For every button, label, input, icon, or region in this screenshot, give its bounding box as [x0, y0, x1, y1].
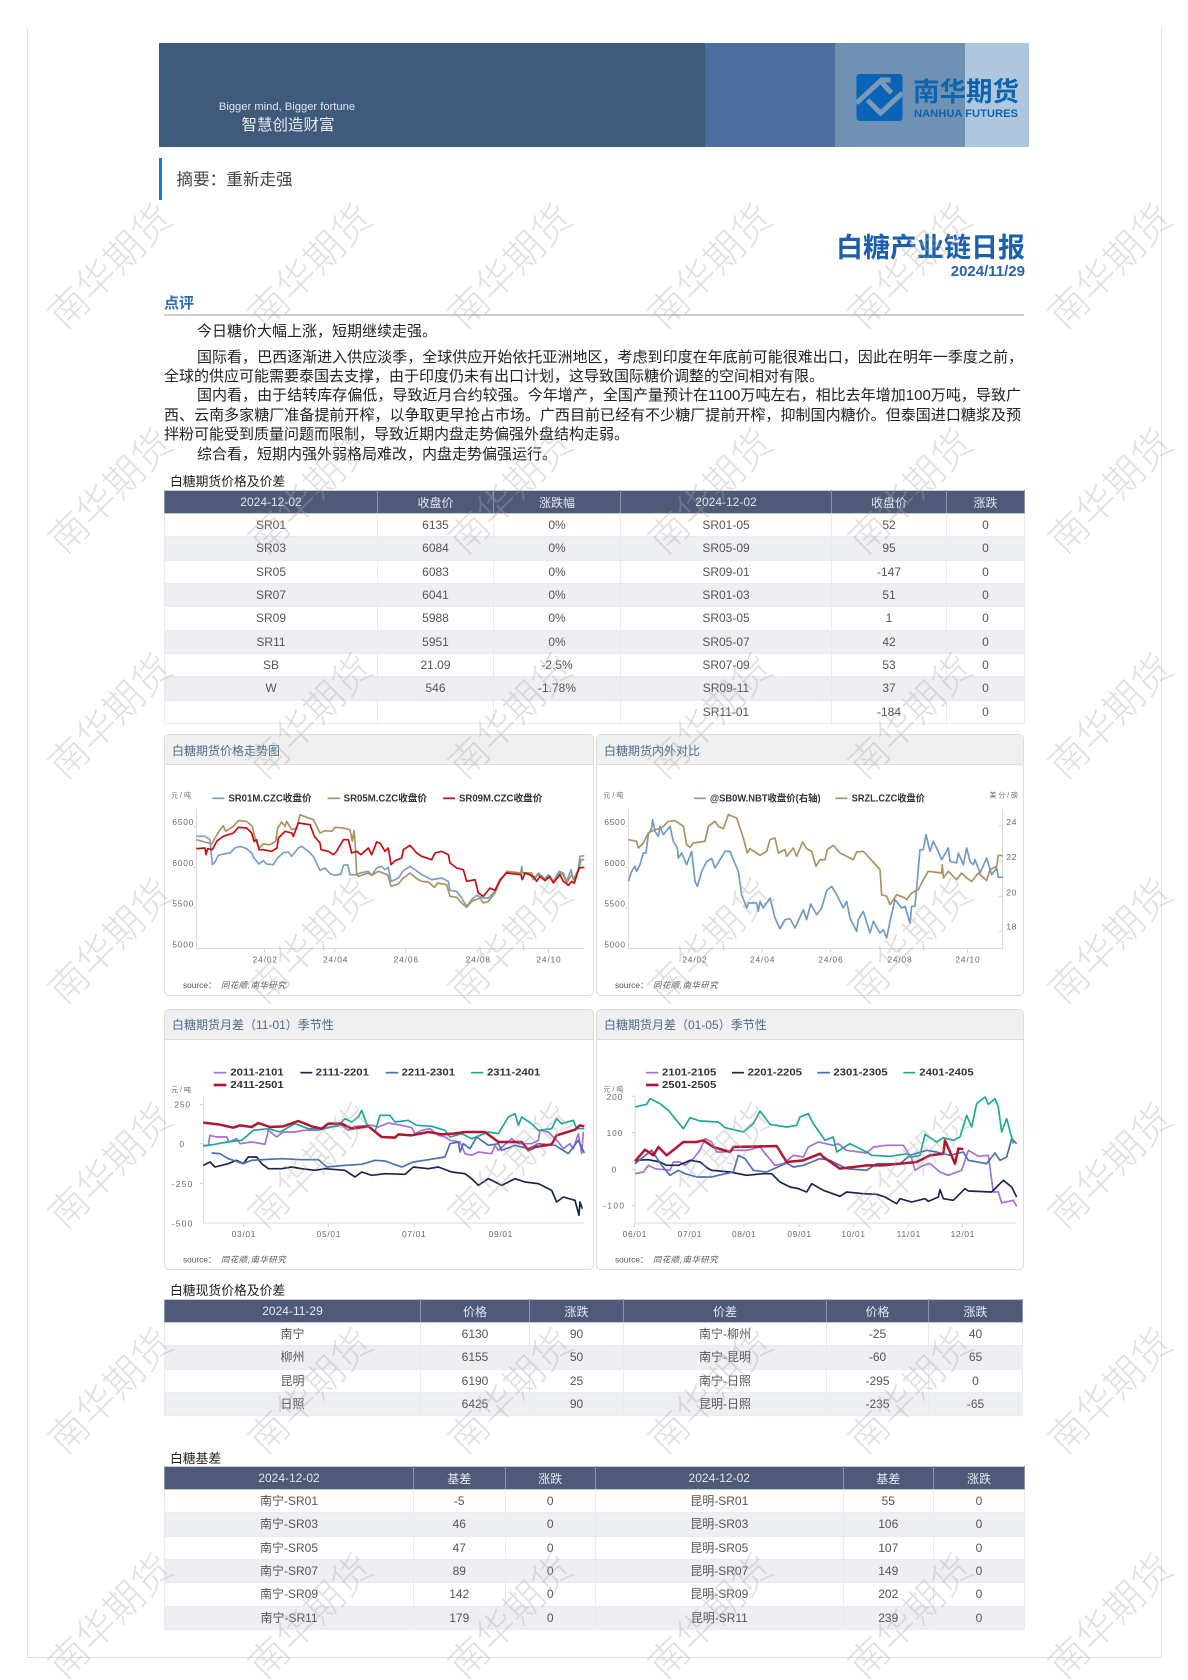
watermark grid: 南华期货 — [41, 1097, 182, 1238]
watermark grid: 南华期货 — [641, 197, 782, 338]
table: basis: 0 — [976, 1587, 982, 1601]
watermark grid: 南华期货 — [1041, 1322, 1182, 1463]
table: basis: 89 — [453, 1564, 466, 1578]
table: futures prices and spreads: 2024-12-02 — [240, 495, 302, 509]
table: futures prices and spreads: SR07-09 — [702, 658, 750, 672]
line chart: SR01 SR05 SR09: 24/08 — [466, 955, 490, 965]
line chart: SB0W vs SRZL dual axis: 6000 — [604, 858, 625, 868]
table: futures prices and spreads: SR03-05 — [702, 611, 750, 625]
watermark grid: 南华期货 — [841, 872, 982, 1013]
line chart: SB0W vs SRZL dual axis: SRZL.CZC收盘价 — [852, 793, 925, 805]
table: futures prices and spreads: SR11 — [256, 635, 286, 649]
table: futures prices and spreads: -147 — [877, 565, 901, 579]
line chart: 01-05 seasonal spreads: 08/01 — [732, 1229, 756, 1239]
table: futures prices and spreads: 6135 — [422, 518, 449, 532]
watermark grid: 南华期货 — [41, 647, 182, 788]
table: spot prices and spreads: 90 — [570, 1397, 583, 1411]
line chart: 01-05 seasonal spreads: 07/01 — [678, 1229, 702, 1239]
watermark grid: 南华期货 — [441, 1322, 582, 1463]
table: futures prices and spreads: 收盘价 — [871, 496, 907, 510]
watermark grid: 南华期货 — [841, 1322, 982, 1463]
table title: basis: 白糖基差 — [170, 1451, 221, 1466]
section heading: commentary — [164, 295, 1024, 316]
table: futures prices and spreads: 6083 — [422, 565, 449, 579]
table: spot prices and spreads: 6190 — [462, 1374, 488, 1388]
table: futures prices and spreads: 51 — [882, 588, 896, 602]
line chart: SB0W vs SRZL dual axis: 同花顺,南华研究 — [653, 980, 719, 990]
summary text: 摘要：重新走强 — [176, 170, 293, 189]
table: futures prices and spreads: 5951 — [422, 635, 449, 649]
watermark grid: 南华期货 — [41, 872, 182, 1013]
table: basis: 昆明-SR07 — [690, 1564, 748, 1578]
table: futures prices and spreads: SR07 — [256, 588, 286, 602]
table: futures prices and spreads: SB — [263, 658, 279, 672]
table: futures prices and spreads: SR09-11 — [703, 681, 749, 695]
line chart: SR01 SR05 SR09: 24/04 — [323, 955, 348, 965]
line chart: 11-01 seasonal spreads — [171, 1067, 585, 1264]
table title: spot prices: 白糖现货价格及价差 — [170, 1283, 285, 1298]
table: futures prices and spreads: 6041 — [422, 588, 449, 602]
watermark grid: 南华期货 — [241, 197, 382, 338]
table: spot prices and spreads: 南宁 — [280, 1327, 304, 1341]
line chart: SB0W vs SRZL dual axis: 24/04 — [750, 955, 775, 965]
table: spot prices and spreads: 价差 — [713, 1304, 737, 1318]
line chart: SR01 SR05 SR09: 5000 — [172, 940, 194, 950]
commentary text block: 西、云南多家糖厂准备提前开榨，以争取更早抢占市场。广西目前已经有不少糖厂提前开榨，抑制国内糖价。但泰国进口糖浆及预 — [164, 406, 1021, 424]
table: spot prices and spreads: -295 — [865, 1374, 890, 1388]
table: futures prices and spreads: 37 — [882, 681, 896, 695]
watermark grid: 南华期货 — [41, 1322, 182, 1463]
table: futures prices and spreads: 0 — [982, 565, 989, 579]
table: futures prices and spreads: 52 — [882, 518, 896, 532]
line chart: SB0W vs SRZL dual axis: 24 — [1006, 817, 1017, 827]
table: spot prices and spreads: 日照 — [280, 1397, 304, 1411]
table: basis: 0 — [547, 1541, 554, 1555]
table: basis: 179 — [449, 1611, 469, 1625]
table: futures prices and spreads: -2.5% — [541, 658, 573, 672]
commentary text block: 今日糖价大幅上涨，短期继续走强。 — [197, 322, 437, 340]
watermark grid: 南华期货 — [1041, 872, 1182, 1013]
table: spot prices and spreads: 南宁-昆明 — [699, 1350, 751, 1364]
watermark grid: 南华期货 — [441, 872, 582, 1013]
watermark grid: 南华期货 — [441, 422, 582, 563]
table: basis: 0 — [976, 1564, 982, 1578]
table: futures prices and spreads: 0% — [548, 635, 566, 649]
watermark grid: 南华期货 — [1041, 1097, 1182, 1238]
table: spot prices and spreads: -25 — [869, 1327, 886, 1341]
line chart: SR01 SR05 SR09 — [171, 791, 584, 990]
table: futures prices and spreads: 0 — [982, 705, 989, 719]
table: basis: 南宁-SR05 — [260, 1541, 318, 1555]
line chart: 11-01 seasonal spreads: -250 — [172, 1179, 193, 1189]
panel title — [597, 1010, 1023, 1040]
line chart: 11-01 seasonal spreads: 07/01 — [402, 1229, 426, 1239]
table: basis: 0 — [976, 1611, 982, 1625]
table: basis: 涨跌 — [967, 1472, 991, 1486]
watermark grid: 南华期货 — [841, 647, 982, 788]
watermark grid: 南华期货 — [241, 647, 382, 788]
table: futures prices and spreads: 0% — [548, 518, 566, 532]
line chart: 01-05 seasonal spreads: 09/01 — [787, 1229, 811, 1239]
table: basis: 0 — [547, 1494, 554, 1508]
table: basis: 0 — [976, 1517, 982, 1531]
line chart: 11-01 seasonal spreads: 2111-2201 — [316, 1067, 370, 1078]
line chart: 01-05 seasonal spreads: 0 — [612, 1164, 617, 1174]
table: basis: 0 — [976, 1494, 982, 1508]
line chart: 11-01 seasonal spreads: source： — [183, 1254, 216, 1264]
line chart: 11-01 seasonal spreads: 03/01 — [232, 1229, 256, 1239]
line chart: 11-01 seasonal spreads: 2311-2401 — [487, 1067, 541, 1078]
table: futures prices and spreads: 0 — [982, 681, 989, 695]
table: spot prices and spreads: 涨跌 — [963, 1304, 988, 1318]
line chart: 01-05 seasonal spreads: 06/01 — [623, 1229, 647, 1239]
line chart: SR01 SR05 SR09: SR05M.CZC收盘价 — [344, 793, 427, 805]
line chart: 01-05 seasonal spreads: 200 — [607, 1092, 623, 1102]
banner slogan chinese: 智慧创造财富 — [241, 117, 334, 134]
table: spot prices and spreads: 25 — [570, 1374, 583, 1388]
panel title — [165, 735, 592, 765]
watermark grid: 南华期货 — [841, 1097, 982, 1238]
line chart: SR01 SR05 SR09: 6000 — [172, 858, 194, 868]
table: futures prices and spreads: 0 — [982, 518, 989, 532]
table: basis: 0 — [976, 1541, 982, 1555]
table: basis: 昆明-SR01 — [690, 1494, 748, 1508]
line chart: SB0W vs SRZL dual axis: 24/08 — [887, 955, 912, 965]
line chart: 11-01 seasonal spreads: 0 — [179, 1139, 184, 1149]
watermark grid: 南华期货 — [241, 1097, 382, 1238]
table: futures prices and spreads: 42 — [882, 635, 896, 649]
line chart: SR01 SR05 SR09: 6500 — [172, 817, 194, 827]
panel title: 白糖期货内外对比 — [604, 744, 700, 758]
table: futures prices and spreads: 2024-12-02 — [695, 495, 757, 509]
table: spot prices and spreads: 昆明-日照 — [699, 1397, 751, 1411]
line chart: 11-01 seasonal spreads: 05/01 — [317, 1229, 341, 1239]
table: futures prices and spreads: 546 — [425, 681, 446, 695]
watermark grid: 南华期货 — [1041, 422, 1182, 563]
banner band: mid blue — [705, 43, 835, 147]
line chart: SB0W vs SRZL dual axis: 5500 — [604, 899, 625, 909]
table: futures prices and spreads: 0 — [982, 588, 989, 602]
line chart: 01-05 seasonal spreads: 2201-2205 — [748, 1067, 803, 1078]
commentary text block: 综合看，短期内强外弱格局难改，内盘走势偏强运行。 — [197, 446, 557, 462]
line chart: SB0W vs SRZL dual axis: 20 — [1006, 888, 1017, 898]
table: futures prices and spreads: 6084 — [422, 541, 449, 555]
table: basis: 昆明-SR09 — [690, 1587, 748, 1601]
table: spot prices and spreads: 40 — [969, 1327, 982, 1341]
table: futures prices and spreads: SR01-03 — [702, 588, 750, 602]
panel: domestic vs overseas chart — [596, 734, 1024, 996]
table: spot prices and spreads: 昆明 — [280, 1374, 304, 1388]
line chart: 01-05 seasonal spreads: 2301-2305 — [833, 1067, 888, 1078]
watermark grid: 南华期货 — [441, 1097, 582, 1238]
line chart: 11-01 seasonal spreads: 同花顺,南华研究 — [221, 1254, 287, 1264]
table: futures prices and spreads: SR03 — [256, 541, 286, 555]
table: spot prices and spreads: 6425 — [462, 1397, 488, 1411]
table: basis: 南宁-SR11 — [260, 1611, 318, 1625]
table: basis: 106 — [878, 1517, 898, 1531]
line chart: SB0W vs SRZL dual axis: @SB0W.NBT收盘价(右轴) — [710, 793, 821, 805]
table: futures prices and spreads: SR05-07 — [702, 635, 750, 649]
table: futures prices and spreads: 0% — [548, 588, 566, 602]
table: futures prices and spreads: SR05-09 — [702, 541, 750, 555]
table: basis: 南宁-SR09 — [260, 1587, 318, 1601]
table: futures prices and spreads: SR09 — [256, 611, 286, 625]
line chart: SR01 SR05 SR09: 同花顺,南华研究 — [221, 980, 287, 990]
watermark grid: 南华期货 — [441, 647, 582, 788]
table: spot prices and spreads — [164, 1299, 1023, 1416]
table: basis: 47 — [453, 1541, 466, 1555]
commentary text block: 拌粉可能受到质量问题而限制，导致近期内盘走势偏强外盘结构走弱。 — [164, 426, 629, 443]
table: basis: 昆明-SR03 — [690, 1517, 748, 1531]
banner slogan english: Bigger mind, Bigger fortune — [219, 101, 355, 113]
table: basis: 46 — [453, 1517, 466, 1531]
section heading: commentary: 点评 — [164, 295, 194, 312]
table title: futures prices: 白糖期货价格及价差 — [170, 474, 285, 489]
line chart: 11-01 seasonal spreads: 元/吨 — [171, 1085, 191, 1094]
commentary text block: 国内看，由于结转库存偏低，导致近月合约较强。今年增产，全国产量预计在1100万吨左右，相比去年增加100万吨，导致广 — [197, 387, 1021, 404]
table: futures prices and spreads: 0% — [548, 541, 566, 555]
table: futures prices and spreads — [164, 490, 1025, 724]
line chart: SB0W vs SRZL dual axis: 6500 — [604, 817, 625, 827]
watermark grid: 南华期货 — [41, 197, 182, 338]
table: basis: 基差 — [447, 1472, 471, 1486]
panel title — [597, 735, 1023, 765]
report title: 白糖产业链日报 — [836, 233, 1025, 263]
table: spot prices and spreads: -60 — [869, 1350, 886, 1364]
table: basis: 2024-12-02 — [689, 1471, 750, 1485]
line chart: SR01 SR05 SR09: source： — [183, 980, 216, 990]
watermark grid: 南华期货 — [241, 422, 382, 563]
watermark grid: 南华期货 — [641, 872, 782, 1013]
line chart: SB0W vs SRZL dual axis: source： — [615, 980, 648, 990]
line chart: 11-01 seasonal spreads: 2411-2501 — [230, 1080, 284, 1091]
report date: 2024/11/29 — [951, 262, 1025, 280]
line chart: SB0W vs SRZL dual axis: 24/02 — [682, 955, 707, 965]
table: basis: 2024-12-02 — [258, 1471, 320, 1485]
banner band: pale blue — [965, 43, 1029, 147]
line chart: 01-05 seasonal spreads: 2101-2105 — [662, 1067, 717, 1078]
line chart: SR01 SR05 SR09: 5500 — [172, 899, 194, 909]
line chart: SB0W vs SRZL dual axis: 元/吨 — [603, 791, 623, 800]
watermark grid: 南华期货 — [41, 422, 182, 563]
header banner — [159, 43, 1029, 147]
table: spot prices and spreads: 90 — [570, 1327, 583, 1341]
line chart: 01-05 seasonal spreads: -100 — [603, 1200, 624, 1210]
table: basis: 南宁-SR07 — [260, 1564, 318, 1578]
table: futures prices and spreads: -184 — [877, 705, 901, 719]
table: futures prices and spreads: 1 — [886, 611, 892, 625]
table: basis: 南宁-SR01 — [260, 1494, 318, 1508]
watermark grid: 南华期货 — [841, 422, 982, 563]
table: spot prices and spreads: 价格 — [865, 1304, 890, 1318]
table: basis: 南宁-SR03 — [260, 1517, 318, 1531]
table: spot prices and spreads: -65 — [967, 1397, 984, 1411]
watermark grid: 南华期货 — [1041, 647, 1182, 788]
table: spot prices and spreads: 65 — [969, 1350, 982, 1364]
watermark grid: 南华期货 — [641, 1322, 782, 1463]
icon: nanhua logo mark — [856, 74, 903, 121]
table: futures prices and spreads: 0% — [548, 611, 566, 625]
table: futures prices and spreads: 收盘价 — [417, 496, 454, 510]
line chart: SB0W vs SRZL dual axis: 24/06 — [818, 955, 843, 965]
table: spot prices and spreads: 0 — [972, 1374, 979, 1388]
watermark grid: 南华期货 — [241, 1322, 382, 1463]
watermark grid: 南华期货 — [241, 872, 382, 1013]
table: futures prices and spreads: 5988 — [422, 611, 449, 625]
line chart: 01-05 seasonal spreads: 同花顺,南华研究 — [653, 1254, 719, 1264]
table: spot prices and spreads: 6155 — [462, 1350, 488, 1364]
line chart: 11-01 seasonal spreads: -500 — [172, 1218, 193, 1228]
table: futures prices and spreads: 21.09 — [420, 658, 451, 672]
line chart: 01-05 seasonal spreads: source： — [615, 1254, 648, 1264]
line chart: SB0W vs SRZL dual axis — [603, 791, 1018, 990]
table: spot prices and spreads: 南宁-日照 — [699, 1374, 751, 1388]
line chart: 01-05 seasonal spreads: 100 — [607, 1128, 623, 1138]
table: basis: 107 — [878, 1541, 898, 1555]
line chart: 01-05 seasonal spreads: 11/01 — [897, 1229, 921, 1239]
table: futures prices and spreads: SR09-01 — [702, 565, 750, 579]
commentary text block: 国际看，巴西逐渐进入供应淡季，全球供应开始依托亚洲地区，考虑到印度在年底前可能很难出口，因此在明年一季度之前， — [197, 348, 1023, 366]
table: spot prices and spreads: -235 — [865, 1397, 890, 1411]
commentary text block: 全球的供应可能需要泰国去支撑，由于印度仍未有出口计划，这导致国际糖价调整的空间相对有限。 — [164, 368, 824, 385]
panel title: 白糖期货月差（01-05）季节性 — [604, 1018, 767, 1032]
panel title: 白糖期货价格走势图 — [172, 744, 280, 758]
table: basis: 142 — [449, 1587, 469, 1601]
table: spot prices and spreads: 50 — [570, 1350, 583, 1364]
line chart: SR01 SR05 SR09: SR09M.CZC收盘价 — [459, 793, 543, 805]
watermark grid: 南华期货 — [441, 197, 582, 338]
watermark grid: 南华期货 — [841, 197, 982, 338]
summary accent bar — [159, 158, 162, 200]
line chart: 01-05 seasonal spreads: 10/01 — [841, 1229, 865, 1239]
line chart: 11-01 seasonal spreads: 250 — [174, 1099, 190, 1109]
watermark grid: 南华期货 — [641, 1097, 782, 1238]
table: futures prices and spreads: SR01-05 — [702, 518, 750, 532]
line chart: SR01 SR05 SR09: SR01M.CZC收盘价 — [228, 793, 312, 805]
table: basis: 202 — [878, 1587, 898, 1601]
logo wordmark chinese: 南华期货 — [913, 77, 1019, 107]
table: futures prices and spreads: SR11-01 — [703, 705, 749, 719]
table: basis: -5 — [454, 1494, 465, 1508]
line chart: SB0W vs SRZL dual axis: 22 — [1006, 852, 1017, 862]
line chart: SB0W vs SRZL dual axis: 24/10 — [955, 955, 980, 965]
line chart: 01-05 seasonal spreads: 元/吨 — [603, 1084, 623, 1093]
line chart: SR01 SR05 SR09: 24/06 — [394, 955, 418, 965]
panel title — [165, 1010, 592, 1040]
table: futures prices and spreads: 95 — [882, 541, 896, 555]
panel title: 白糖期货月差（11-01）季节性 — [172, 1018, 334, 1032]
table: spot prices and spreads: 南宁-柳州 — [699, 1327, 751, 1341]
table: futures prices and spreads: -1.78% — [538, 681, 576, 695]
line chart: 11-01 seasonal spreads: 2011-2101 — [230, 1067, 284, 1078]
line chart: 01-05 seasonal spreads — [603, 1067, 1018, 1264]
panel: futures price trend chart — [164, 734, 594, 996]
table: futures prices and spreads: 53 — [882, 658, 896, 672]
table: spot prices and spreads: 2024-11-29 — [262, 1304, 323, 1318]
table: basis: 55 — [882, 1494, 895, 1508]
table: futures prices and spreads: W — [265, 681, 277, 695]
line chart: SR01 SR05 SR09: 24/10 — [536, 955, 561, 965]
table: futures prices and spreads: 0% — [548, 565, 566, 579]
line chart: SB0W vs SRZL dual axis: 5000 — [604, 940, 625, 950]
table: futures prices and spreads: 0 — [982, 658, 989, 672]
table: basis: 239 — [878, 1611, 898, 1625]
table: futures prices and spreads: SR05 — [256, 565, 286, 579]
line chart: 11-01 seasonal spreads: 2211-2301 — [402, 1067, 456, 1078]
table: futures prices and spreads: SR01 — [256, 518, 286, 532]
line chart: 01-05 seasonal spreads: 12/01 — [951, 1229, 975, 1239]
banner band: steel blue — [835, 43, 965, 147]
watermark grid: 南华期货 — [641, 422, 782, 563]
table: futures prices and spreads: 涨跌 — [973, 496, 998, 510]
watermark grid: 南华期货 — [1041, 197, 1182, 338]
commentary text block — [164, 322, 1023, 462]
table: futures prices and spreads: 0 — [982, 541, 989, 555]
line chart: SR01 SR05 SR09: 元/吨 — [171, 791, 191, 800]
table: spot prices and spreads: 涨跌 — [564, 1304, 588, 1318]
table: futures prices and spreads: 涨跌幅 — [539, 496, 575, 510]
line chart: 11-01 seasonal spreads: 09/01 — [489, 1229, 513, 1239]
table: basis: 149 — [878, 1564, 898, 1578]
line chart: SB0W vs SRZL dual axis: 18 — [1006, 922, 1017, 932]
table: basis: 0 — [547, 1517, 554, 1531]
table: basis: 0 — [547, 1564, 554, 1578]
table: futures prices and spreads: 0 — [982, 635, 989, 649]
line chart: SR01 SR05 SR09: 24/02 — [253, 955, 277, 965]
table: basis: 昆明-SR05 — [690, 1541, 748, 1555]
table: spot prices and spreads: 6130 — [462, 1327, 488, 1341]
table: futures prices and spreads: 0 — [982, 611, 989, 625]
table: basis: 0 — [547, 1611, 554, 1625]
panel: 11-01 spread seasonality chart — [164, 1009, 594, 1270]
table: basis: 昆明-SR11 — [691, 1611, 748, 1625]
table: spot prices and spreads: 价格 — [463, 1304, 487, 1318]
table: basis: 涨跌 — [538, 1472, 562, 1486]
watermark grid: 南华期货 — [641, 647, 782, 788]
line chart: 01-05 seasonal spreads: 2501-2505 — [662, 1080, 717, 1091]
table: basis: 0 — [547, 1587, 554, 1601]
panel: 01-05 spread seasonality chart — [596, 1009, 1024, 1270]
table: basis — [164, 1466, 1025, 1630]
table: basis: 基差 — [876, 1472, 900, 1486]
line chart: SB0W vs SRZL dual axis: 美分/磅 — [989, 791, 1018, 800]
line chart: 01-05 seasonal spreads: 2401-2405 — [919, 1067, 974, 1078]
table: spot prices and spreads: 柳州 — [280, 1350, 304, 1364]
